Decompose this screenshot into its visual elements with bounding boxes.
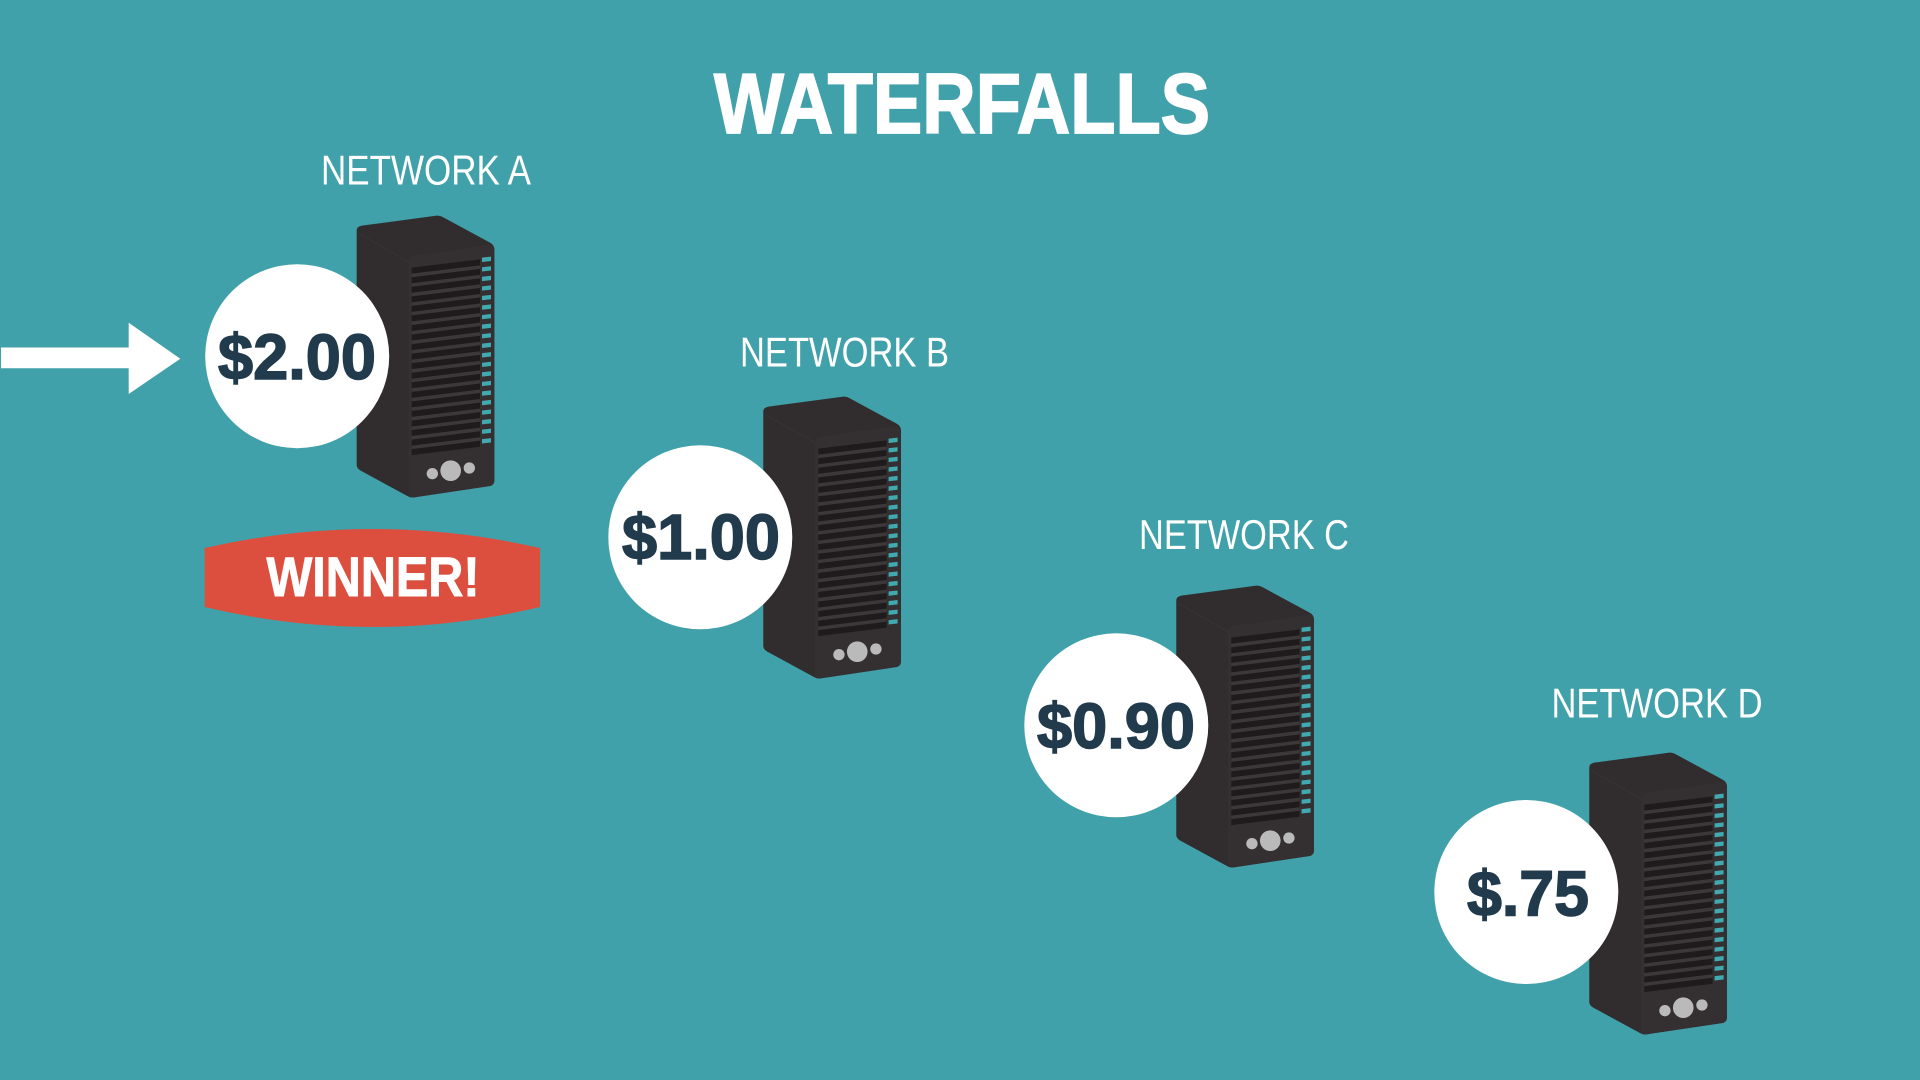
panel: network C <box>1024 511 1349 868</box>
price badge circle D <box>1434 800 1618 984</box>
label: network A: NETWORK A <box>321 147 531 194</box>
panel: network B <box>608 328 949 679</box>
banner text: WINNER! <box>266 545 480 608</box>
label: network D: NETWORK D <box>1552 679 1762 726</box>
icon: server D <box>1589 753 1727 1035</box>
icon: server B <box>763 397 901 679</box>
price C: $0.90 <box>1037 690 1195 762</box>
icon: server A <box>357 216 494 498</box>
title: WATERFALLS <box>714 57 1210 152</box>
price badge circle B <box>608 445 792 629</box>
price A: $2.00 <box>218 321 376 393</box>
arrow pointing at network A <box>1 323 180 394</box>
panel: network A <box>205 147 531 498</box>
price badge circle C <box>1024 633 1208 817</box>
label: network C: NETWORK C <box>1139 511 1349 558</box>
banner shape <box>205 529 540 627</box>
label: network B: NETWORK B <box>740 328 949 375</box>
winner banner <box>205 529 540 627</box>
price D: $.75 <box>1467 858 1589 930</box>
icon: server C <box>1176 586 1314 868</box>
panel: network D <box>1434 679 1762 1035</box>
price badge circle A <box>205 264 389 448</box>
price B: $1.00 <box>622 501 780 573</box>
